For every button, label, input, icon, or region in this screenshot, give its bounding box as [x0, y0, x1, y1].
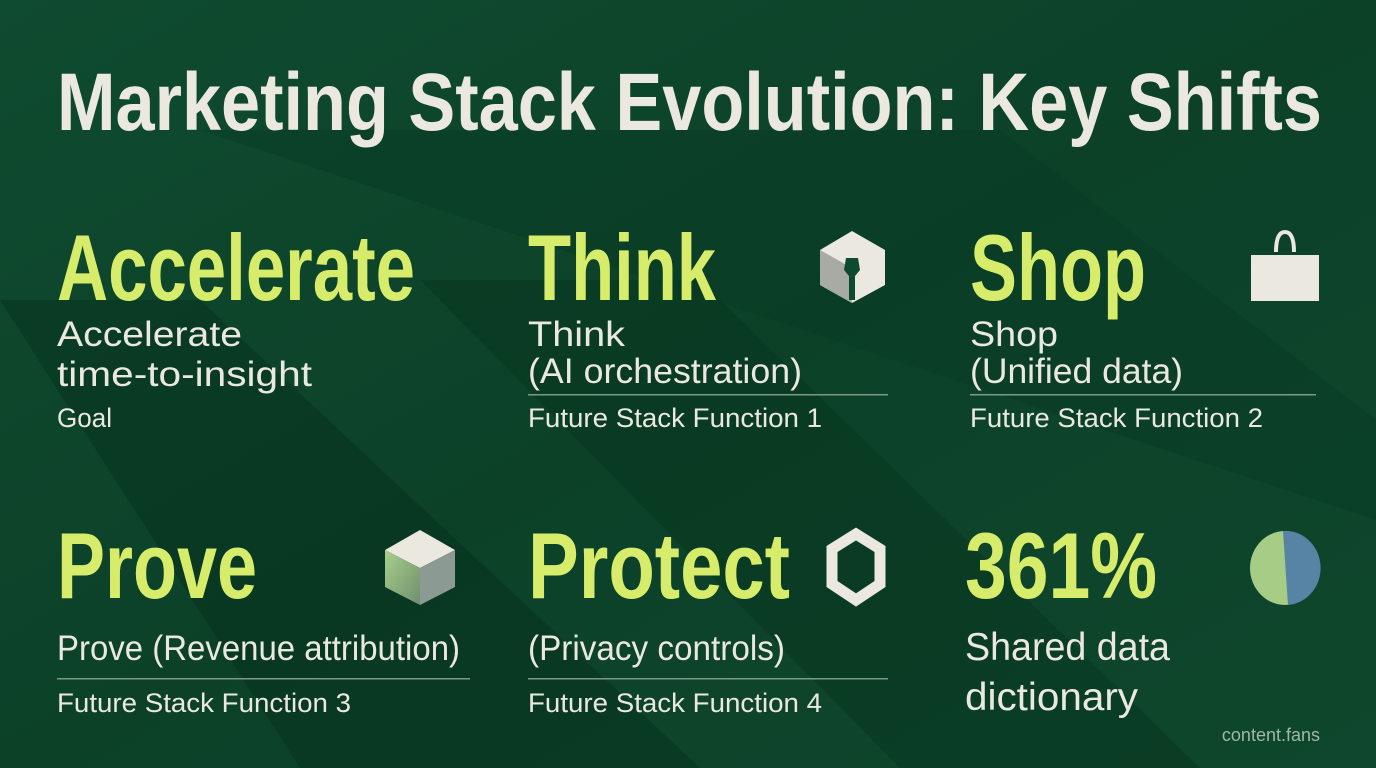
panel: shop [970, 215, 1319, 433]
icon: cube [385, 530, 455, 605]
panel: 361%: Shared data [965, 626, 1170, 669]
panel: accelerate [57, 215, 415, 433]
panel: prove: Prove (Revenue attribution) [57, 629, 460, 668]
panel: shop: Future Stack Function 2 [970, 403, 1263, 433]
panel: accelerate: Accelerate [57, 315, 242, 354]
icon: shopping bag [1251, 232, 1319, 301]
icon: pie chart [1250, 531, 1321, 605]
panel: think [528, 215, 888, 433]
panel: prove: Prove [57, 513, 257, 618]
panel: think: Future Stack Function 1 [528, 403, 822, 433]
panel: shop: Shop [970, 315, 1058, 354]
icon: hexagon keyhole [820, 231, 885, 303]
panel: accelerate: time-to-insight [57, 355, 312, 394]
panel: protect [528, 513, 888, 718]
panel: accelerate: Accelerate [57, 215, 415, 320]
panel: protect: (Privacy controls) [528, 629, 785, 668]
panel: shop: (Unified data) [970, 352, 1183, 391]
panel: shop: Shop [970, 215, 1146, 320]
panel: think: Think [528, 215, 717, 320]
panel: 361%: 361% [965, 513, 1157, 618]
panel: prove: Future Stack Function 3 [57, 688, 351, 718]
panel: think: Think [528, 315, 626, 354]
diagonal shadow bands (decorative) [0, 300, 700, 768]
panel: accelerate: Goal [57, 403, 112, 433]
panel: protect: Future Stack Function 4 [528, 688, 822, 718]
panel: 361% [965, 513, 1321, 719]
panel: think: (AI orchestration) [528, 352, 802, 391]
footer credit: content.fans [1222, 725, 1320, 745]
panel: protect: Protect [528, 513, 790, 618]
panel: prove [57, 513, 470, 718]
panel: 361%: dictionary [965, 676, 1139, 719]
icon: hexagon outline [832, 534, 880, 600]
